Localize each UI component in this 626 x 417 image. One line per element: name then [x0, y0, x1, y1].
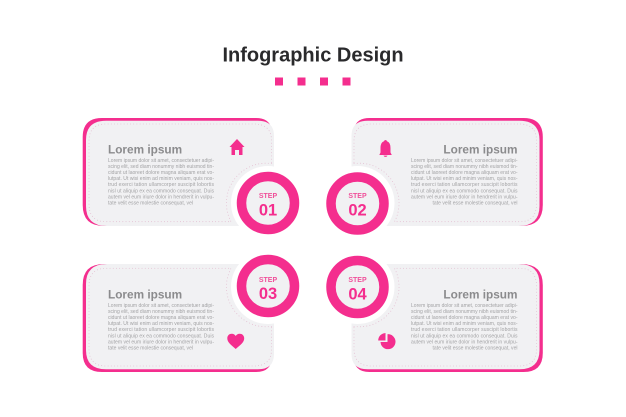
- panel 02 body text: cidunt ut laoreet dolore magna aliquam erat vo-: [411, 170, 518, 176]
- panel 03 heading: Lorem ipsum: [108, 288, 182, 302]
- panel 03 body text: scing elit, sed diam nonummy nibh euismod tin-: [108, 309, 214, 315]
- panel 03 body text: nisl ut aliquip ex ea commodo consequat. Duis: [108, 333, 214, 339]
- panel: step 01: [83, 118, 305, 240]
- panel 01 background: [83, 118, 305, 240]
- panel 04 body text: scing elit, sed diam nonummy nibh euismod tin-: [411, 309, 518, 315]
- step 02 number: 02: [348, 202, 367, 220]
- panel 04 heading: Lorem ipsum: [443, 288, 518, 302]
- panel 03 body text: cidunt ut laoreet dolore magna aliquam erat vo-: [108, 315, 214, 321]
- panel 02 body text: Lorem ipsum dolor sit amet, consectetuer adipi-: [411, 158, 518, 164]
- step 03 number: 03: [259, 285, 277, 303]
- step 04 ring: [331, 260, 384, 314]
- panel: step 03: [83, 250, 305, 372]
- step 02 ring: [331, 177, 384, 230]
- panel 04 body text: trud exerci tation ullamcorper suscipit lobortis: [411, 327, 518, 333]
- panel 04 body text: nisl ut aliquip ex ea commodo consequat. Duis: [411, 333, 518, 339]
- panel 03 body text: lutpat. Ut wisi enim ad minim veniam, quis nos-: [108, 321, 214, 327]
- panel 03 body text: Lorem ipsum dolor sit amet, consectetuer adipi-: [108, 303, 214, 309]
- panel: step 02: [320, 118, 543, 240]
- step 01 label: STEP: [259, 193, 277, 200]
- panel 03 body text: [108, 303, 214, 352]
- panel 04 body text: tate velit esse molestie consequat, vel: [432, 346, 518, 352]
- panel: step 04: [320, 250, 543, 372]
- panel 02 body text: tate velit esse molestie consequat, vel: [432, 200, 518, 206]
- panel 01 heading: Lorem ipsum: [108, 142, 182, 156]
- panel 03 background: [83, 250, 305, 372]
- panel 04 body text: autem vel eum iriure dolor in hendrerit in vulpu-: [411, 339, 518, 345]
- panel 02 background: [320, 118, 543, 240]
- step 03 ring: [242, 260, 294, 312]
- panel 03 body text: tate velit esse molestie consequat, vel: [108, 346, 193, 352]
- panel 02 body text: scing elit, sed diam nonummy nibh euismod tin-: [411, 164, 518, 170]
- panel 01 body text: tate velit esse molestie consequat, vel: [108, 200, 193, 206]
- panel 04 body text: [411, 303, 518, 352]
- icon: bell: [379, 140, 392, 157]
- panel 04 background: [320, 250, 543, 372]
- panel 01 body text: nisl ut aliquip ex ea commodo consequat. Duis: [108, 188, 214, 194]
- panel 02 body text: nisl ut aliquip ex ea commodo consequat. Duis: [411, 188, 518, 194]
- title decoration: four pink squares: [275, 78, 350, 86]
- panel 03 body text: autem vel eum iriure dolor in hendrerit in vulpu-: [108, 339, 214, 345]
- panel 02 body text: lutpat. Ut wisi enim ad minim veniam, quis nos-: [411, 176, 518, 182]
- step 01 ring: [242, 176, 294, 230]
- panel 02 body text: [411, 158, 518, 206]
- panel 01 body text: scing elit, sed diam nonummy nibh euismod tin-: [108, 164, 214, 170]
- step 03 label: STEP: [259, 277, 277, 284]
- step 02 label: STEP: [348, 193, 367, 200]
- panel 01 body text: Lorem ipsum dolor sit amet, consectetuer adipi-: [108, 158, 214, 164]
- panel 04 body text: Lorem ipsum dolor sit amet, consectetuer adipi-: [411, 303, 518, 309]
- icon: home: [230, 139, 244, 155]
- icon: pie chart: [378, 333, 395, 349]
- step 04 number: 04: [348, 286, 367, 304]
- step 01 number: 01: [259, 202, 277, 220]
- panel 01 body text: [108, 158, 214, 206]
- panel 03 body text: trud exerci tation ullamcorper suscipit lobortis: [108, 327, 214, 333]
- panel 01 body text: lutpat. Ut wisi enim ad minim veniam, quis nos-: [108, 176, 214, 182]
- panel 02 body text: autem vel eum iriure dolor in hendrerit in vulpu-: [411, 194, 518, 200]
- title: Infographic Design: [222, 44, 404, 66]
- panel 02 body text: trud exerci tation ullamcorper suscipit lobortis: [411, 182, 518, 188]
- panel 01 body text: trud exerci tation ullamcorper suscipit lobortis: [108, 182, 214, 188]
- panel 01 body text: autem vel eum iriure dolor in hendrerit in vulpu-: [108, 194, 214, 200]
- panel 04 body text: lutpat. Ut wisi enim ad minim veniam, quis nos-: [411, 321, 518, 327]
- step 04 label: STEP: [348, 277, 367, 284]
- panel 04 body text: cidunt ut laoreet dolore magna aliquam erat vo-: [411, 315, 518, 321]
- panel 01 body text: cidunt ut laoreet dolore magna aliquam erat vo-: [108, 170, 214, 176]
- panel 02 heading: Lorem ipsum: [443, 142, 518, 156]
- icon: heart: [227, 334, 244, 349]
